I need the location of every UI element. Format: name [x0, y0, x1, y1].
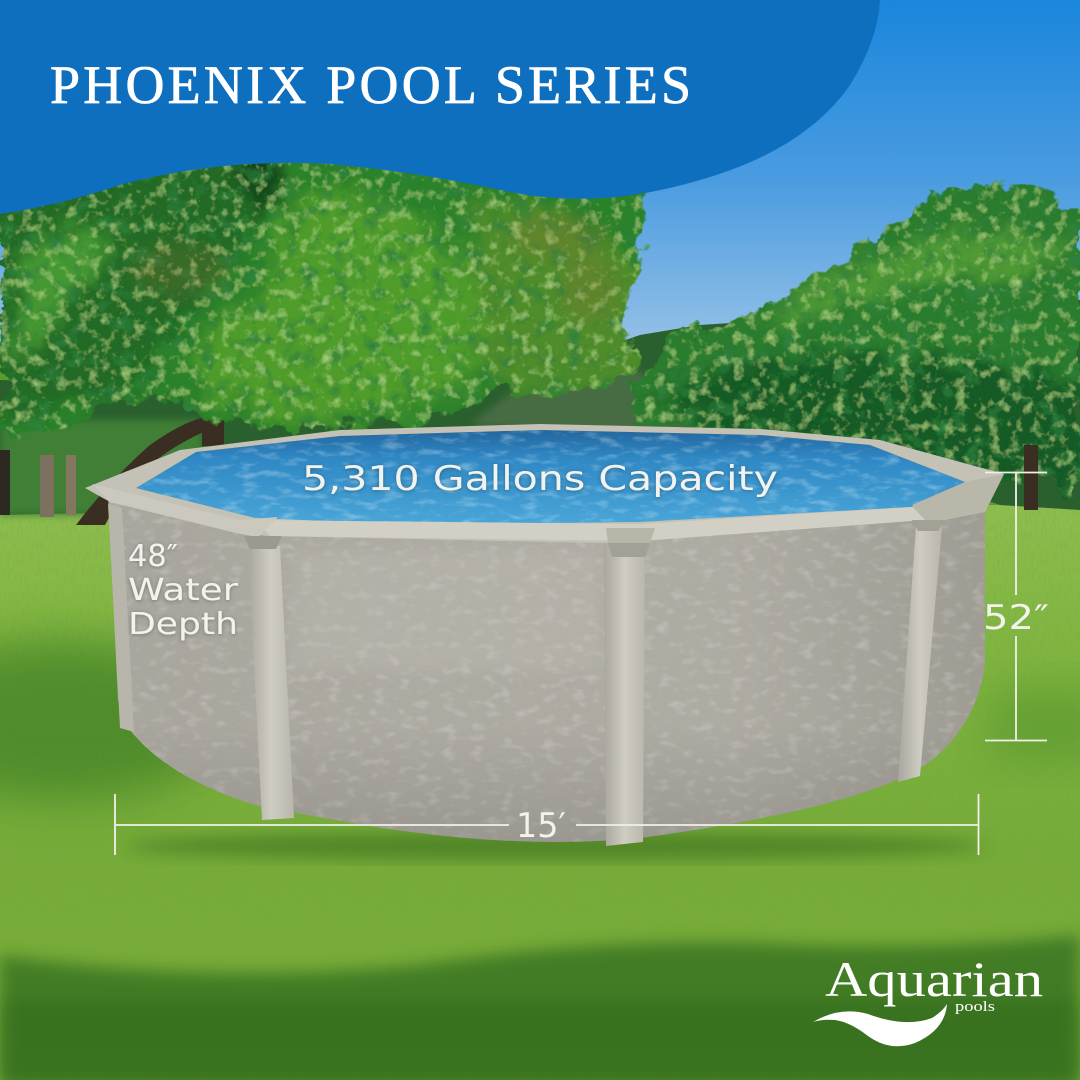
pool: [85, 424, 1004, 850]
height dimension: 52 inches: [983, 472, 1049, 740]
sky: [0, 0, 1080, 360]
height dimension: 52 inches: 52″: [983, 598, 1049, 638]
top rail: [85, 424, 1004, 543]
title: PHOENIX POOL SERIES: [50, 55, 691, 115]
capacity label: 5,310 Gallons Capacity: [302, 459, 778, 499]
logo: Aquarian pools: Aquarian: [825, 951, 1043, 1007]
water depth label: Depth: [128, 607, 238, 642]
rail front shading: [255, 507, 925, 541]
tree: large left canopy: [0, 150, 644, 440]
tree trunks: [0, 400, 1038, 525]
orange foliage tint: [130, 213, 618, 324]
grass lawn: [0, 505, 1080, 1080]
background tree line, distant: [0, 300, 1080, 515]
width dimension: 15 feet: [115, 794, 978, 855]
water depth label: Water: [128, 573, 239, 608]
pool wall: [100, 490, 1000, 850]
tree: right group: [630, 183, 1080, 500]
water depth label: [128, 539, 239, 642]
logo: Aquarian pools: [813, 951, 1043, 1046]
pool water: [136, 430, 965, 525]
panel: blue header shape: [0, 0, 880, 214]
icon: wave swoosh: [813, 1004, 947, 1046]
logo: Aquarian pools: pools: [955, 999, 995, 1015]
water depth label: 48″: [128, 539, 178, 574]
width dimension: 15 feet: 15′: [516, 806, 566, 846]
uprights: [108, 504, 134, 732]
